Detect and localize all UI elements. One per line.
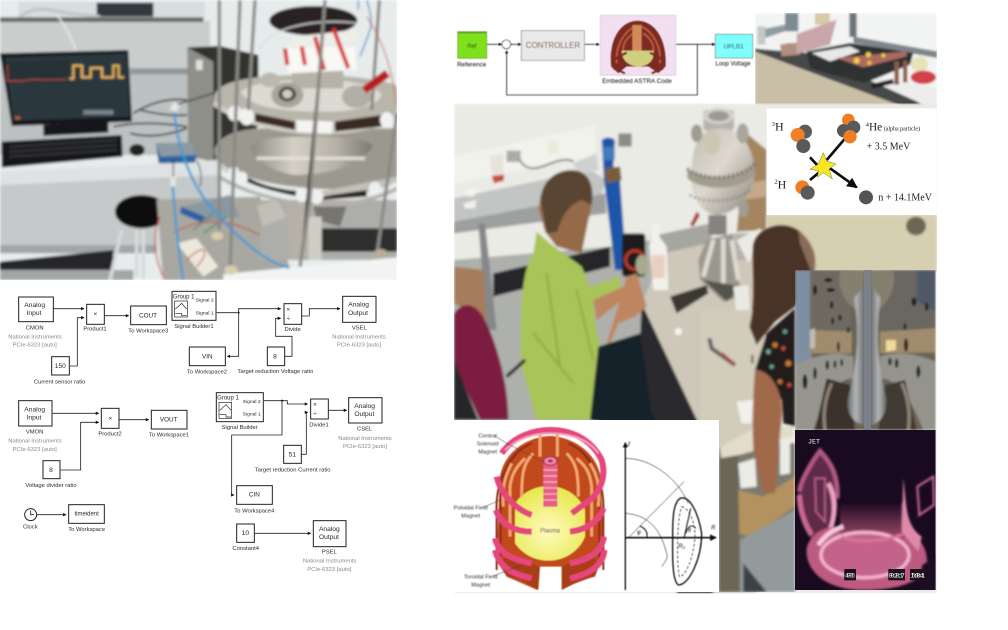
block: VOUT To Workspace1: To Workspace1 xyxy=(149,433,189,439)
red and blue details xyxy=(362,70,390,93)
reel xyxy=(622,233,645,277)
red office chair xyxy=(454,305,508,420)
toroidal magnet body xyxy=(497,436,604,590)
block: PSEL analog output: National Instruments xyxy=(303,559,356,565)
timestamp blocks: 4005 xyxy=(845,573,855,580)
label: tritium: 3 xyxy=(772,121,776,128)
block: Signal Builder1: Group 1 xyxy=(173,294,195,300)
block: CIN To Workspace4: CIN xyxy=(249,492,260,499)
block: Signal Builder: Signal 1 xyxy=(243,412,261,418)
block: Signal Builder: Signal Builder xyxy=(222,425,258,431)
block: target current ratio 51: 51 xyxy=(289,451,296,458)
steel bench xyxy=(642,233,762,593)
block: CSEL analog output xyxy=(338,398,392,450)
lower table xyxy=(157,197,290,280)
blue cables xyxy=(174,110,289,268)
poloidal field rings xyxy=(495,430,604,578)
label: helium output: (alpha particle) xyxy=(882,126,920,133)
block: CSEL analog output: Analog xyxy=(354,403,375,410)
block: target current ratio 51 xyxy=(255,445,331,473)
label: helium output: 4 xyxy=(866,122,870,129)
photo: pink tokamak plasma: 15:08:41 xyxy=(910,573,925,580)
block: CIN To Workspace4 xyxy=(234,486,275,514)
block: VSEL analog output: VSEL xyxy=(352,325,368,331)
block: PSEL analog output: PSEL xyxy=(322,550,338,556)
monitor xyxy=(0,50,132,126)
block: Ref: Reference xyxy=(457,62,487,69)
block: voltage divider ratio 8: 8 xyxy=(49,467,53,474)
magnet labels: Magnet xyxy=(461,514,481,520)
block: CMON analog input: Analog xyxy=(24,302,45,309)
block: VSEL analog output: National Instruments xyxy=(332,335,386,341)
label R0: R₀ xyxy=(678,544,686,550)
block: Product2: × xyxy=(108,415,112,422)
block: Signal Builder: Group 1 xyxy=(217,396,239,402)
block: VSEL analog output: Output xyxy=(348,310,368,317)
block: VMON analog input: PCIe-6323 [auto] xyxy=(13,447,57,453)
block: VIN To Workspace2 xyxy=(187,347,227,376)
sum junction xyxy=(502,40,511,49)
photo: tokamak vessel interior xyxy=(795,270,936,430)
block: Ref: Ref xyxy=(467,44,477,50)
photo: pink tokamak plasma xyxy=(795,430,936,590)
PC tower xyxy=(187,46,258,162)
photo detail: woman, wall and lower bench xyxy=(700,215,937,592)
block: voltage divider ratio 8 xyxy=(25,461,77,489)
block: VMON analog input: VMON xyxy=(26,429,43,435)
block: VSEL analog output: Analog xyxy=(348,302,369,309)
block: constant 10: 10 xyxy=(242,530,249,537)
block: Clock xyxy=(23,509,38,530)
block: PSEL analog output: Output xyxy=(319,534,339,541)
block: UPLB1: UPLB1 xyxy=(724,43,744,50)
cables xyxy=(113,99,187,136)
block: To Workspace3: COUT xyxy=(139,312,157,319)
block: PSEL analog output: Analog xyxy=(319,526,340,533)
photo: compact tokamak with oscilloscope monitor in laboratory xyxy=(0,0,397,280)
block: To Workspace3: To Workspace3 xyxy=(128,329,168,335)
helium nucleus xyxy=(837,114,860,143)
block: Divide1: ÷ xyxy=(313,411,317,418)
bottle xyxy=(649,223,668,290)
block diagram: Simulink DAQ model xyxy=(8,291,392,573)
axis label R: R xyxy=(711,525,716,531)
blue box xyxy=(156,143,197,163)
block: Ref xyxy=(457,32,487,69)
coils with tape xyxy=(269,6,357,35)
block: VIN To Workspace2: VIN xyxy=(202,354,213,361)
block: Signal Builder xyxy=(216,393,263,431)
man shirt and body xyxy=(521,232,622,420)
block: constant 10 xyxy=(232,524,260,552)
block: Product2: Product2 xyxy=(98,431,122,437)
vacuum vessel on stand xyxy=(703,110,734,131)
lower magnet legs xyxy=(498,555,540,590)
block: constant 150 xyxy=(34,357,85,385)
block: Clock: Clock xyxy=(23,524,38,530)
tritium nucleus xyxy=(791,125,812,153)
white bench bottom right xyxy=(223,257,397,280)
block: Divide1: Divide1 xyxy=(309,423,329,429)
wall trunking xyxy=(454,125,597,183)
photo: researchers assembling vacuum vessel xyxy=(454,103,937,593)
magnet labels: Magnet xyxy=(478,449,498,455)
rods xyxy=(219,0,397,270)
block: Signal Builder1: Signal 2 xyxy=(196,298,214,304)
block: Product1: Product1 xyxy=(83,327,107,333)
deuterium nucleus xyxy=(795,180,815,200)
block: target voltage ratio 8: 8 xyxy=(273,353,277,360)
neutron xyxy=(859,190,873,204)
block: Divide1 xyxy=(309,399,329,429)
block: Divide: Divide xyxy=(285,327,301,333)
block: constant 150: 150 xyxy=(55,363,66,370)
block: target voltage ratio 8: Target reduction Voltage ratio xyxy=(237,369,313,375)
stool xyxy=(110,227,163,280)
block: PSEL analog output xyxy=(303,521,356,573)
block: constant 10: Constant4 xyxy=(232,546,260,552)
block: CIN To Workspace4: To Workspace4 xyxy=(234,508,275,514)
block: VOUT To Workspace1 xyxy=(149,410,189,439)
block: constant 150: Current sensor ratio xyxy=(34,379,85,385)
label: camera id: JET xyxy=(808,437,820,445)
block: VMON analog input: Analog xyxy=(24,406,45,413)
block: embedded ASTRA code: Embedded ASTRA Code xyxy=(602,78,672,85)
block: Signal Builder: Signal 2 xyxy=(243,399,261,405)
photo: bench with component trays by a window xyxy=(755,13,937,108)
block: CMON analog input: National Instruments xyxy=(8,335,62,341)
block diagram: closed-loop plasma control xyxy=(445,13,755,103)
block: To Workspace timeident xyxy=(68,505,105,533)
block: VSEL analog output xyxy=(332,296,386,349)
axis label Z: z xyxy=(626,441,630,447)
block: To Workspace timeident: timeident xyxy=(75,512,99,518)
label: energy 3.5 MeV: + 3.5 MeV xyxy=(867,141,911,152)
block: VMON analog input: Input xyxy=(27,414,42,421)
label: deuterium: H xyxy=(778,177,787,191)
block: controller xyxy=(521,31,584,60)
block: To Workspace timeident: To Workspace xyxy=(68,527,105,533)
block: UPLB1 xyxy=(715,34,753,68)
lower vacuum assembly xyxy=(260,200,397,260)
grey floor and rear desk xyxy=(454,223,717,423)
label: tritium: H xyxy=(775,120,784,134)
coordinate axes xyxy=(625,443,716,590)
angle label phi: φ xyxy=(637,530,641,536)
block: Signal Builder1: Signal 1 xyxy=(196,310,214,316)
photo: pink tokamak plasma: 09:28:17 xyxy=(889,573,905,580)
magnet labels: Poloidal Field xyxy=(454,505,488,511)
block: target voltage ratio 8 xyxy=(237,347,313,375)
block: CMON analog input xyxy=(8,297,62,349)
block: Divide1: × xyxy=(313,402,317,409)
angle label theta: θ xyxy=(688,528,692,534)
block: CMON analog input: PCIe-6323 [auto] xyxy=(13,343,57,349)
diagram: D-T fusion reaction xyxy=(767,108,937,215)
magnet labels xyxy=(454,433,561,589)
block: Divide: × xyxy=(286,307,290,314)
block: VSEL analog output: PCIe-6323 [auto] xyxy=(337,343,381,349)
block: Divide xyxy=(284,304,302,333)
magnet labels: Plasma xyxy=(540,528,561,534)
label: helium output: He xyxy=(869,122,882,134)
block: CSEL analog output: PCIe-6323 [auto] xyxy=(343,444,387,450)
block: VMON analog input xyxy=(8,401,62,453)
block: Signal Builder1: Signal Builder1 xyxy=(174,324,214,330)
block: Product1: × xyxy=(93,311,97,318)
dome & ports xyxy=(292,70,343,88)
block: controller: CONTROLLER xyxy=(526,41,581,50)
plasma sphere xyxy=(509,486,588,561)
block: CMON analog input: Input xyxy=(27,310,42,317)
explosion star xyxy=(810,153,836,179)
desk xyxy=(0,160,220,185)
block: To Workspace3 xyxy=(128,306,168,335)
block: voltage divider ratio 8: Voltage divider ratio xyxy=(25,483,77,489)
block: CSEL analog output: CSEL xyxy=(357,427,373,433)
block: VOUT To Workspace1: VOUT xyxy=(160,416,178,423)
block: CMON analog input: CMON xyxy=(26,325,44,331)
block: VIN To Workspace2: To Workspace2 xyxy=(187,370,227,376)
central solenoid xyxy=(543,462,557,507)
magnet labels: Toroidal Field xyxy=(464,574,497,580)
upper ring xyxy=(214,75,397,128)
block: Product2 xyxy=(98,408,122,437)
diagram: tokamak magnet cutaway and plasma cross-section xyxy=(454,420,719,592)
block: Divide: ÷ xyxy=(287,316,291,323)
block: embedded ASTRA code xyxy=(600,15,676,85)
block: VMON analog input: National Instruments xyxy=(8,439,62,445)
label: deuterium: 2 xyxy=(774,179,778,186)
block: Product1 xyxy=(83,304,107,333)
block: target current ratio 51: Target reduction Current ratio xyxy=(255,467,331,473)
lower ring xyxy=(214,128,397,189)
gas cylinder xyxy=(602,137,627,270)
block: UPLB1: Loop Voltage xyxy=(716,62,751,68)
block: Signal Builder1 xyxy=(172,291,216,330)
magnet labels: Magnet xyxy=(471,583,491,589)
block: PSEL analog output: PCIe-6323 [auto] xyxy=(307,567,352,573)
toroidal field magnets xyxy=(497,443,603,570)
block: CSEL analog output: National Instruments xyxy=(338,436,392,442)
block: CSEL analog output: Output xyxy=(354,411,374,418)
magnet labels: Solenoid xyxy=(477,441,499,447)
magnet labels: Central xyxy=(479,433,497,439)
label: neutron 14.1 MeV: n + 14.1MeV xyxy=(878,193,933,204)
keyboard xyxy=(2,135,123,168)
